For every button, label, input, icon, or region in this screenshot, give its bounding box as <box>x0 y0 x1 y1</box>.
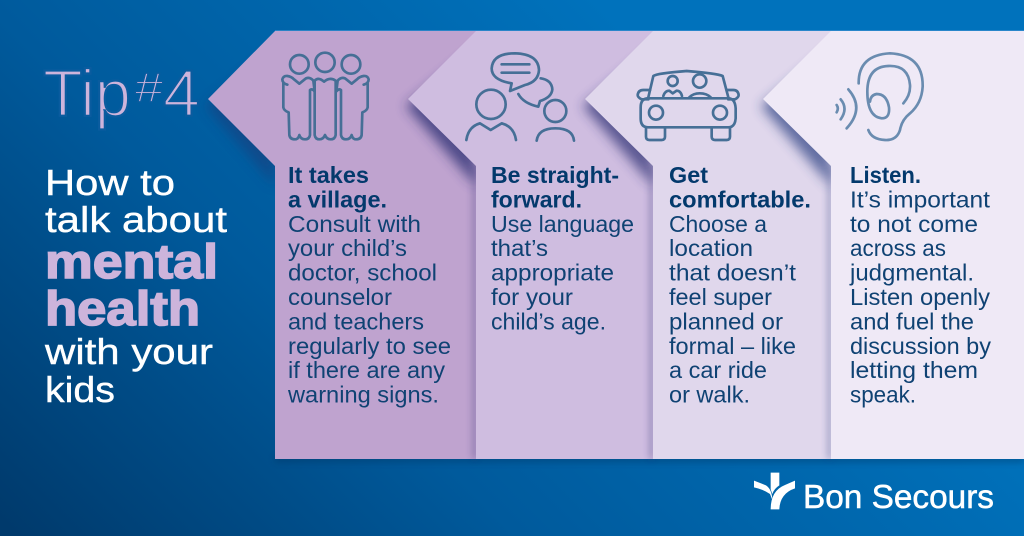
tip number heading: Tip <box>43 56 131 130</box>
text: it takes a village: and teachers <box>288 308 424 334</box>
text: be straightforward: Be straight- <box>491 162 619 188</box>
tip number heading <box>43 56 200 130</box>
text: be straightforward: that’s <box>491 235 548 261</box>
logo: Bon Secours <box>754 473 994 515</box>
main title <box>44 162 227 410</box>
logo wordmark: Bon Secours <box>803 478 994 515</box>
panel shape: straightforward <box>408 31 1024 459</box>
panel: it takes a village <box>206 31 1024 459</box>
tip number heading: # <box>135 64 164 111</box>
text: listen: Listen. <box>850 162 921 188</box>
text: listen: speak. <box>850 382 916 408</box>
text: it takes a village: counselor <box>288 284 392 310</box>
text: get comfortable: comfortable. <box>669 186 811 212</box>
panel: get comfortable <box>583 31 1024 459</box>
text: it takes a village: a village. <box>288 186 387 212</box>
text: listen: It’s important <box>850 186 991 212</box>
text: it takes a village: your child’s <box>288 235 407 261</box>
text: listen: discussion by <box>850 333 991 359</box>
text: listen <box>849 162 991 408</box>
main title: talk about <box>45 199 227 240</box>
text: be straightforward: Use language <box>491 211 634 237</box>
icon: car with two passengers <box>638 71 739 140</box>
icon: ear with sound waves <box>837 53 923 140</box>
panel: listen <box>761 31 1024 459</box>
text: listen: judgmental. <box>849 260 974 286</box>
main title: health <box>45 283 200 336</box>
text: listen: to not come <box>850 211 978 237</box>
icon: two people talking <box>466 53 574 141</box>
text: get comfortable: Choose a <box>669 211 767 237</box>
text: listen: and fuel the <box>850 308 974 334</box>
text: get comfortable: that doesn’t <box>669 260 797 286</box>
text: get comfortable: Get <box>669 162 708 188</box>
text: be straightforward: for your <box>491 284 573 310</box>
text: be straightforward: appropriate <box>491 260 614 286</box>
text: be straightforward: child’s age. <box>491 308 606 334</box>
text: it takes a village: if there are any <box>288 357 446 383</box>
text: get comfortable: a car ride <box>669 357 767 383</box>
tip number heading: 4 <box>163 56 200 130</box>
text: get comfortable <box>669 162 811 408</box>
text: listen: letting them <box>850 357 978 383</box>
panel shape: listen <box>763 31 1024 459</box>
text: it takes a village: warning signs. <box>287 382 439 408</box>
text: get comfortable: formal – like <box>669 333 796 359</box>
main title: How to <box>45 162 175 203</box>
text: it takes a village: It takes <box>288 162 369 188</box>
text: be straightforward: forward. <box>491 186 582 212</box>
text: listen: across as <box>850 235 946 261</box>
icon: three people <box>282 53 369 139</box>
panel: be straightforward <box>406 31 1024 459</box>
text: get comfortable: location <box>669 235 753 261</box>
text: be straightforward <box>491 162 634 334</box>
text: it takes a village <box>287 162 451 408</box>
panel shape: village <box>208 31 1024 459</box>
panel shape: comfortable <box>585 31 1024 459</box>
main title: mental <box>45 236 218 289</box>
main title: kids <box>45 369 115 410</box>
main title: with your <box>44 331 213 372</box>
text: get comfortable: or walk. <box>669 382 750 408</box>
text: get comfortable: planned or <box>669 308 783 334</box>
text: get comfortable: feel super <box>669 284 772 310</box>
text: listen: Listen openly <box>850 284 991 310</box>
text: it takes a village: doctor, school <box>288 260 437 286</box>
icon: logo mark <box>754 473 795 509</box>
text: it takes a village: Consult with <box>288 211 421 237</box>
text: it takes a village: regularly to see <box>288 333 451 359</box>
